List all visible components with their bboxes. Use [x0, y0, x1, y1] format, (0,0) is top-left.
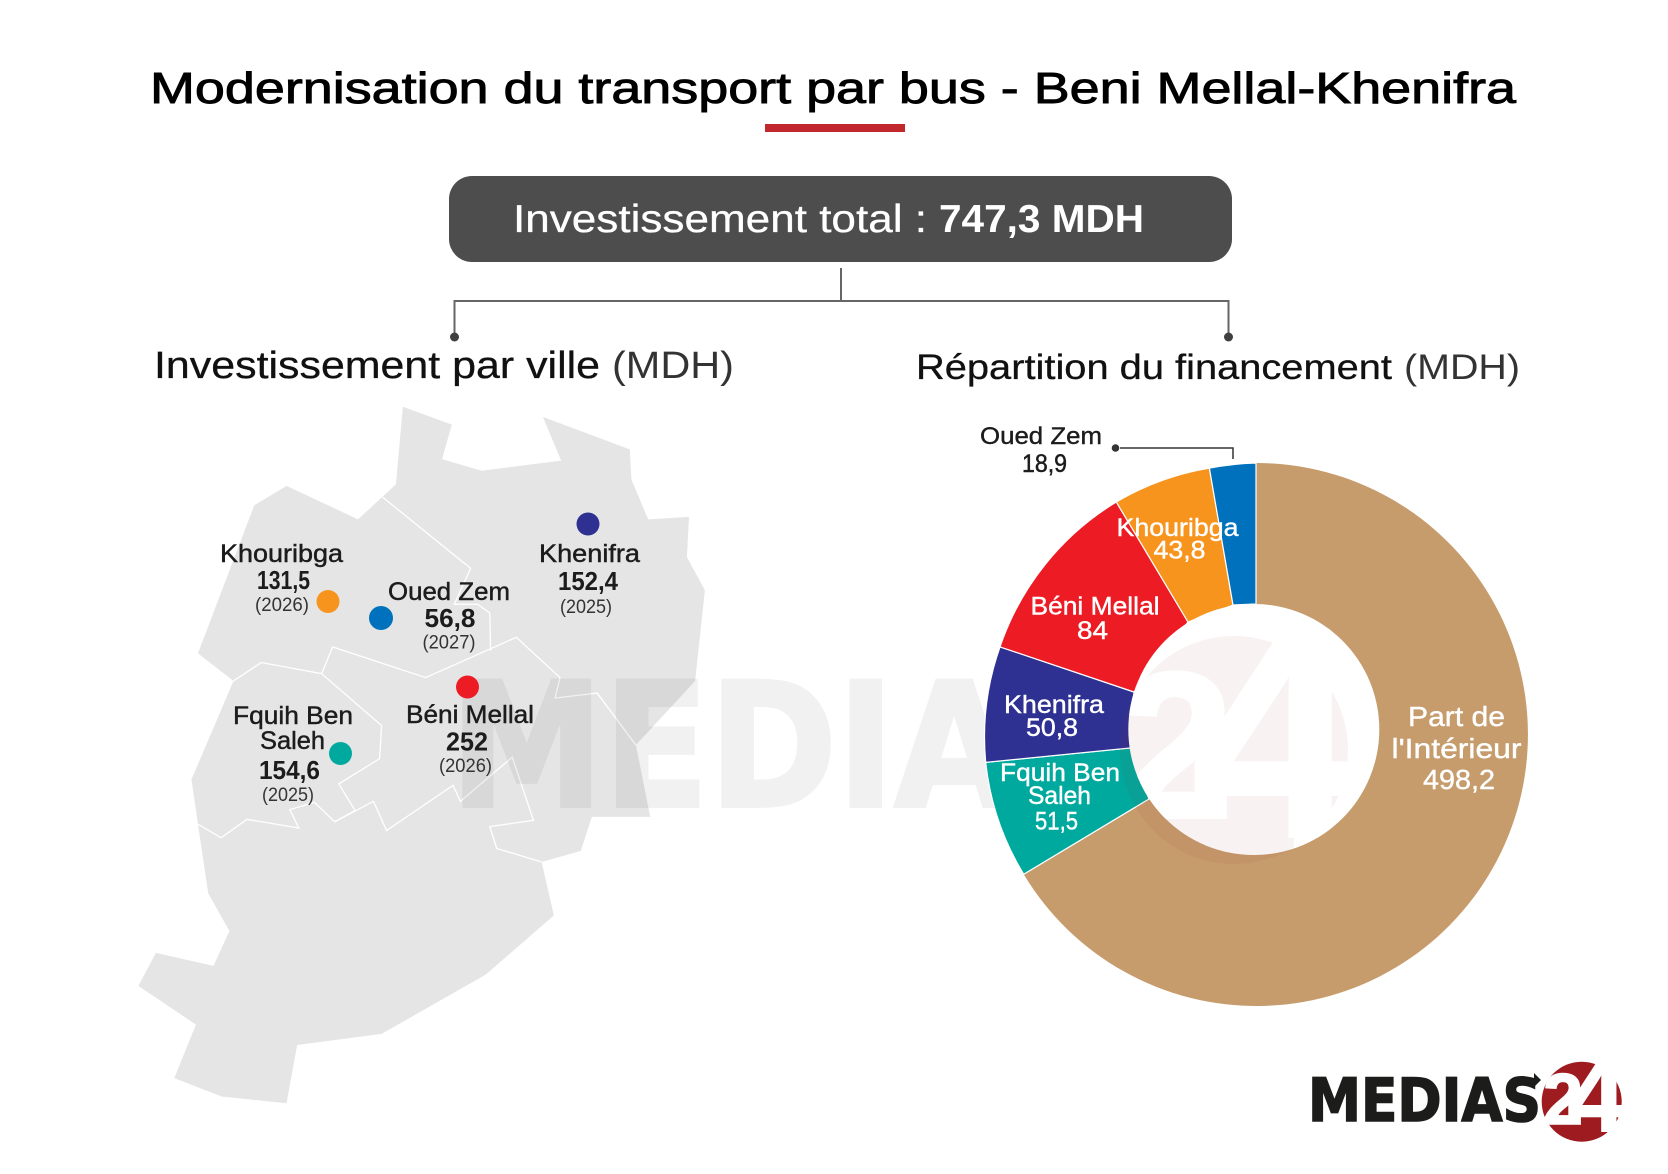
label: Fquih Ben Saleh: (2025) [262, 785, 314, 806]
donut label: Béni Mellal: Béni Mellal [1030, 592, 1160, 620]
watermark: MEDIAS: MEDIAS [450, 646, 1125, 847]
donut hole [1128, 604, 1379, 855]
donut label: Part de l'Intérieur: 498,2 [1423, 764, 1495, 795]
total investment box: Investissement total : [513, 198, 927, 241]
title: Modernisation du transport par bus - Beni Mellal-Khenifra [150, 64, 1517, 113]
slice: Khouribga [1116, 468, 1233, 622]
label: Fquih Ben Saleh [233, 702, 353, 806]
total investment box: 747,3 MDH [939, 198, 1144, 241]
watermark: 24 circle [1120, 636, 1348, 864]
heading: investment by city: (MDH) [612, 345, 734, 387]
logo: MEDIAS24: MEDIAS [1308, 1066, 1541, 1136]
donut label: Fquih Ben Saleh [1000, 759, 1120, 836]
slice: Khenifra [985, 647, 1134, 762]
slice: Béni Mellal [1000, 502, 1188, 692]
donut chart [985, 463, 1528, 1006]
label: Béni Mellal: (2026) [439, 756, 492, 777]
donut label: Khouribga: 43,8 [1154, 536, 1206, 564]
donut label: Khouribga [1116, 514, 1239, 564]
donut label: Fquih Ben Saleh: 51,5 [1035, 808, 1078, 836]
heading: funding split [916, 348, 1520, 387]
title accent bar [765, 124, 905, 132]
watermark: 24 digits: 2 [1118, 630, 1233, 861]
label: Khouribga: Khouribga [220, 540, 343, 568]
connector tree [450, 268, 1233, 342]
heading: investment by city: Investissement par ville [154, 345, 600, 387]
label: Béni Mellal: Béni Mellal [406, 701, 534, 729]
label: Béni Mellal: 252 [446, 726, 488, 756]
donut label: Fquih Ben Saleh: Fquih Ben [1000, 759, 1120, 787]
label: Fquih Ben Saleh: Fquih Ben [233, 702, 353, 730]
donut label: Part de l'Intérieur [1392, 701, 1522, 795]
dot: Oued Zem [369, 606, 393, 630]
donut label: Khenifra: 50,8 [1026, 714, 1078, 742]
slice: Part de l'Intérieur [1024, 463, 1528, 1006]
watermark: 24 digits: 4 [1192, 564, 1361, 900]
label: Khenifra: 152,4 [558, 566, 618, 596]
heading: funding split: Répartition du financement [916, 348, 1392, 387]
dot: Khenifra [576, 512, 600, 536]
donut label: Khouribga: Khouribga [1116, 514, 1239, 542]
donut label: Khenifra: Khenifra [1004, 691, 1104, 719]
heading: funding split: (MDH) [1404, 348, 1520, 387]
dot: Khouribga [316, 590, 340, 613]
slice: Fquih Ben Saleh [986, 748, 1149, 874]
logo: MEDIAS24: 2 [1543, 1060, 1583, 1140]
donut label: Béni Mellal: 84 [1077, 617, 1108, 645]
heading: investment by city [154, 345, 734, 387]
donut label: Béni Mellal [1030, 592, 1160, 645]
donut label: Khenifra [1004, 691, 1104, 742]
dot: Béni Mellal [456, 676, 479, 698]
donut label: Oued Zem [980, 423, 1102, 478]
total investment box [449, 176, 1232, 262]
slice: Oued Zem [1209, 463, 1256, 605]
donut label: Fquih Ben Saleh: Saleh [1028, 782, 1091, 810]
donut label: Oued Zem: 18,9 [1022, 450, 1067, 478]
label: Oued Zem: 56,8 [424, 603, 476, 633]
label: Khouribga: 131,5 [257, 565, 310, 595]
label: Khenifra: (2025) [560, 597, 612, 618]
map of the region [138, 407, 705, 1103]
leader line: Oued Zem [1112, 444, 1233, 459]
label: Oued Zem: Oued Zem [388, 578, 510, 606]
label: Khouribga [220, 540, 343, 616]
label: Fquih Ben Saleh: Saleh [260, 727, 325, 755]
donut label: Part de l'Intérieur: l'Intérieur [1392, 733, 1522, 764]
donut label: Oued Zem: Oued Zem [980, 423, 1102, 450]
logo: MEDIAS24: 4 [1568, 1037, 1626, 1154]
label: Khenifra: Khenifra [539, 540, 640, 568]
label: Fquih Ben Saleh: 154,6 [259, 755, 320, 785]
label: Oued Zem: (2027) [422, 632, 476, 654]
label: Khenifra [539, 540, 640, 618]
dot: Fquih Ben Saleh [329, 742, 352, 765]
watermark: 24 digits [1129, 628, 1348, 848]
donut label: Part de l'Intérieur: Part de [1408, 701, 1505, 732]
label: Béni Mellal [406, 701, 534, 777]
logo: MEDIAS24 [1308, 1037, 1626, 1154]
label: Khouribga: (2026) [255, 595, 309, 616]
label: Oued Zem [388, 578, 510, 654]
